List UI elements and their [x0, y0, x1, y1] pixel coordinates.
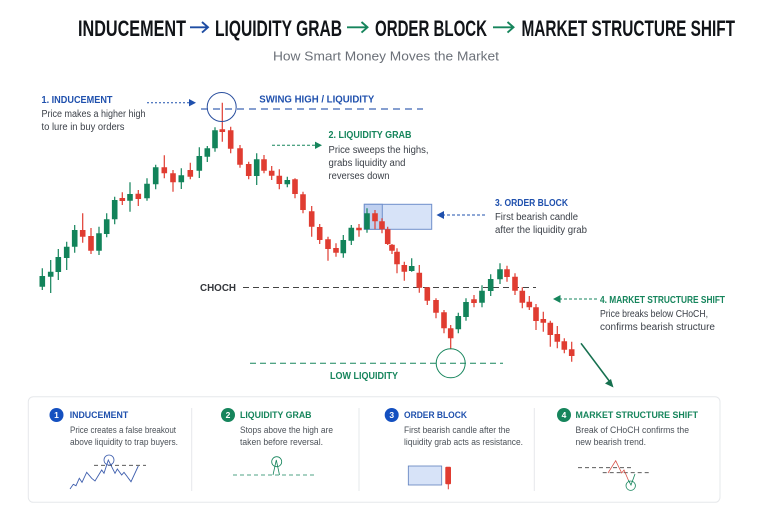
candle wicks: green — [42, 127, 500, 333]
annotation: liquidity grab — [328, 130, 428, 182]
annotation: liquidity grab: reverses down — [328, 171, 390, 182]
annotation: inducement: 1. INDUCEMENT — [42, 95, 112, 106]
label: swing high: SWING HIGH / LIQUIDITY — [259, 94, 375, 106]
annotation: market structure shift — [600, 295, 725, 333]
annotation: order block: after the liquidity grab — [495, 225, 587, 236]
arrow: order block pointer — [436, 211, 485, 219]
candle bodies: red — [83, 129, 572, 356]
card: liquidity grab: 2 — [226, 410, 231, 420]
card: inducement: above liquidity to trap buyers. — [70, 437, 178, 447]
mini chart: structure break — [578, 461, 650, 490]
arrow: inducement pointer — [147, 99, 196, 106]
price chart with candlesticks and levels — [42, 92, 614, 388]
annotation: order block: 3. ORDER BLOCK — [495, 198, 569, 209]
card: liquidity grab: Stops above the high are — [240, 425, 333, 435]
mini chart: stop sweep — [233, 457, 316, 475]
annotation: order block — [495, 198, 587, 236]
card: order block — [385, 408, 523, 489]
mini chart: false breakout — [70, 455, 146, 489]
annotation: market structure shift: 4. MARKET STRUCTURE SHIFT — [600, 295, 725, 306]
candle wicks: red — [83, 103, 572, 362]
level: low liquidity — [250, 362, 503, 364]
card: inducement: 1 — [54, 410, 59, 420]
annotation: liquidity grab: Price sweeps the highs, — [328, 145, 428, 156]
arrow: market structure shift pointer — [553, 295, 597, 303]
candle bodies: green — [42, 130, 500, 329]
swing high circle — [207, 92, 236, 122]
title: INDUCEMENT — [78, 16, 186, 41]
low liquidity circle — [436, 349, 465, 378]
card: order block: liquidity grab acts as resistance. — [404, 437, 523, 447]
card: market structure shift: MARKET STRUCTURE SHIFT — [576, 410, 698, 421]
card: liquidity grab — [221, 408, 333, 475]
arrow: liquidity grab pointer — [272, 142, 322, 149]
level: choch — [243, 286, 536, 288]
arrow: bearish continuation — [581, 343, 614, 388]
level: swing high — [201, 108, 423, 110]
card: market structure shift: 4 — [562, 410, 567, 420]
title: LIQUIDITY GRAB — [215, 16, 342, 41]
annotation: liquidity grab: grabs liquidity and — [328, 158, 406, 169]
annotation: inducement: Price makes a higher high — [42, 109, 146, 120]
card: order block: First bearish candle after the — [404, 425, 510, 435]
annotation: inducement — [42, 95, 146, 133]
card: inducement: INDUCEMENT — [70, 410, 128, 421]
label: choch: CHOCH — [200, 283, 236, 294]
title: ORDER BLOCK — [375, 16, 487, 41]
annotation: market structure shift: Price breaks below CHoCH, — [600, 309, 708, 320]
annotation: order block: First bearish candle — [495, 212, 578, 223]
card: liquidity grab: taken before reversal. — [240, 437, 323, 447]
card: market structure shift: new bearish trend. — [576, 437, 646, 447]
panel: summary legend — [28, 397, 720, 502]
annotation: market structure shift: confirms bearish structure — [600, 322, 715, 333]
title — [78, 16, 735, 41]
subtitle: How Smart Money Moves the Market — [273, 49, 499, 64]
card: market structure shift: Break of CHoCH confirms the — [576, 425, 689, 435]
card: order block: ORDER BLOCK — [404, 410, 467, 421]
card: order block: 3 — [389, 410, 394, 420]
order block zone — [364, 204, 432, 229]
mini chart: order block candle — [408, 466, 451, 489]
annotation: inducement: to lure in buy orders — [42, 122, 124, 133]
label: low liquidity: LOW LIQUIDITY — [330, 371, 398, 382]
annotation: liquidity grab: 2. LIQUIDITY GRAB — [328, 130, 412, 141]
card: market structure shift — [557, 408, 698, 490]
card: liquidity grab: LIQUIDITY GRAB — [240, 410, 312, 421]
card: inducement: Price creates a false breakout — [70, 425, 176, 435]
card: inducement — [50, 408, 178, 489]
